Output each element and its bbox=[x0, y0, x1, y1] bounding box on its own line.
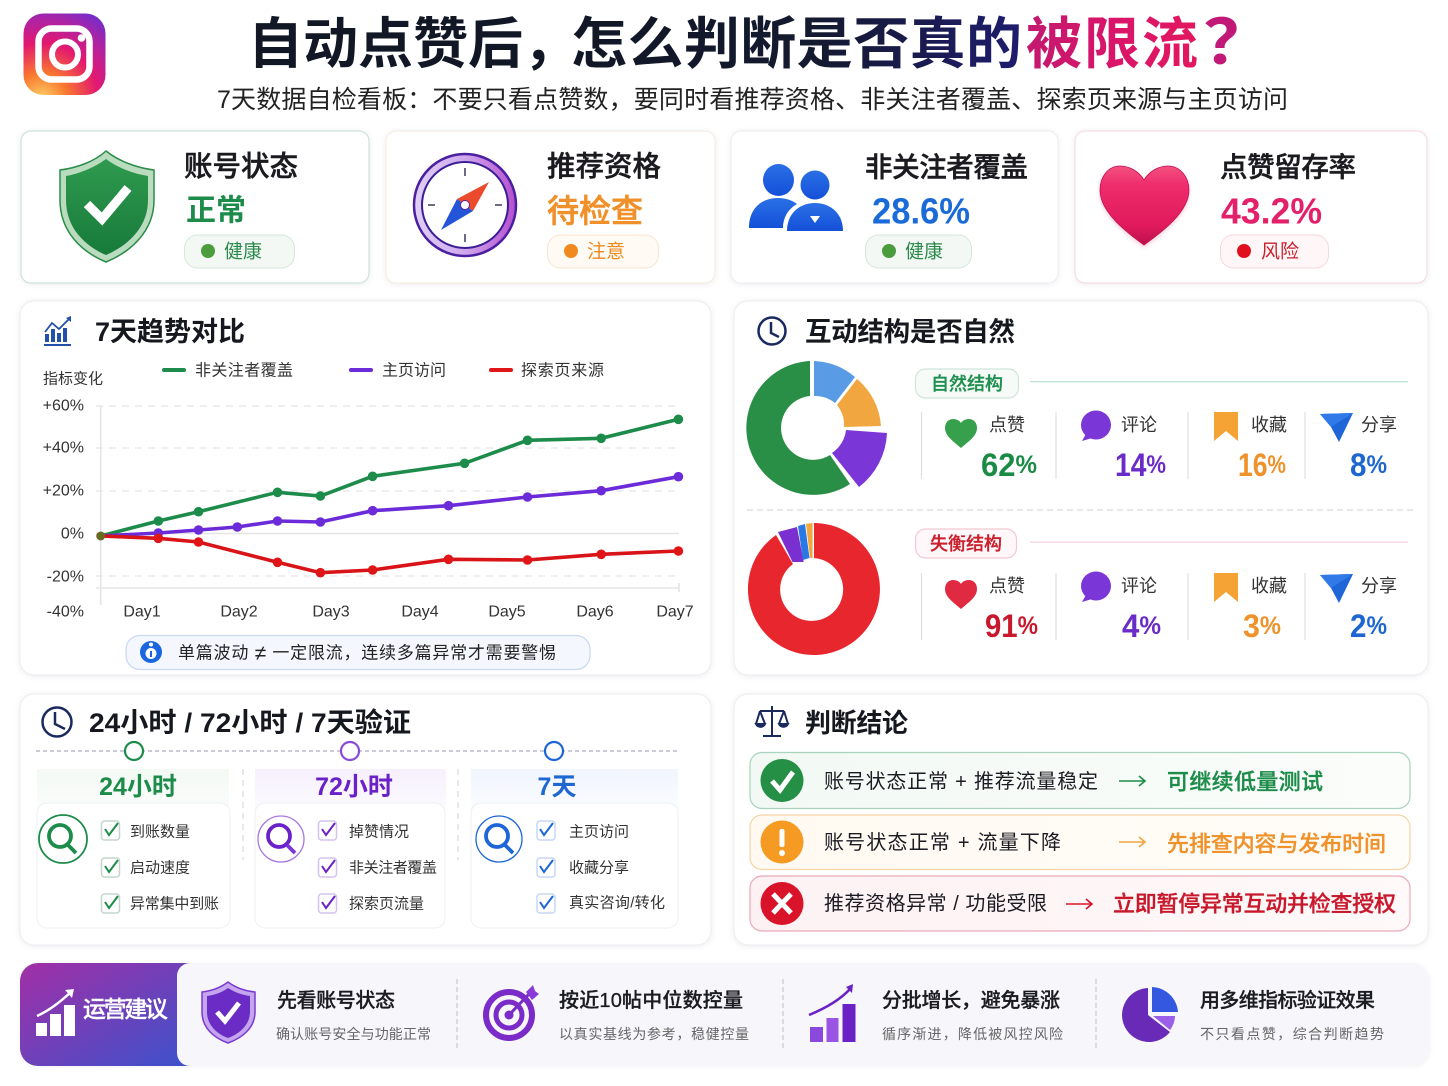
metric: comments 4%: 4% bbox=[1122, 608, 1161, 644]
status pill bbox=[866, 235, 972, 268]
checklist bbox=[318, 821, 437, 913]
metric: likes 91%: 点赞 bbox=[989, 576, 1025, 596]
panel: interaction structure bbox=[734, 301, 1428, 675]
line chart: -20% bbox=[47, 568, 84, 586]
metric: saves 3%: 收藏 bbox=[1251, 576, 1287, 596]
line chart: 0% bbox=[61, 526, 84, 542]
icon: growth bbox=[36, 989, 75, 1036]
line chart: Day4 bbox=[401, 604, 439, 620]
legend: 探索页来源 bbox=[521, 362, 604, 380]
column: 72 hours bbox=[255, 769, 446, 928]
metric: comments 14%: 评论 bbox=[1121, 415, 1157, 435]
metric: likes 91%: 91% bbox=[985, 608, 1038, 644]
line chart bbox=[43, 398, 694, 620]
panel: account status card bbox=[21, 131, 369, 283]
title bbox=[248, 9, 1275, 77]
icon: compass bbox=[414, 154, 516, 256]
icon: people bbox=[749, 164, 843, 231]
row: check content first: 账号状态正常 + 流量下降 bbox=[824, 831, 1061, 854]
advice: check account status: 先看账号状态 bbox=[277, 989, 395, 1012]
title: 怎么判断是否真的 bbox=[571, 12, 1022, 76]
tag: unbalanced structure bbox=[916, 529, 1408, 558]
status pill: 风险 bbox=[1261, 240, 1299, 262]
donut: unbalanced structure bbox=[748, 523, 880, 655]
metric: shares 8%: 8% bbox=[1350, 447, 1387, 483]
icon: scales bbox=[756, 706, 788, 736]
card label: 点赞留存率 bbox=[1220, 152, 1356, 182]
column: 24 hours: 24小时 bbox=[99, 773, 177, 801]
metric: likes 62%: 点赞 bbox=[989, 415, 1025, 435]
icon: clock bbox=[42, 708, 72, 736]
status pill bbox=[1220, 235, 1328, 268]
card label: 推荐资格 bbox=[547, 151, 661, 183]
status pill: 注意 bbox=[587, 240, 625, 262]
status value: 正常 bbox=[186, 194, 246, 228]
status pill bbox=[184, 235, 294, 268]
metric: comments 4%: 评论 bbox=[1121, 576, 1157, 596]
line chart: Day2 bbox=[220, 604, 258, 620]
row: continue testing bbox=[750, 752, 1410, 808]
checklist: 启动速度 bbox=[130, 860, 190, 876]
row: check content first bbox=[750, 815, 1410, 870]
advice: median control bbox=[486, 985, 749, 1042]
metric: shares 8% bbox=[1320, 413, 1397, 483]
label block: operating advice bbox=[20, 963, 210, 1066]
title: ？ bbox=[1203, 9, 1275, 77]
line chart: Day3 bbox=[312, 604, 350, 620]
series: non-follower coverage bbox=[101, 414, 683, 536]
callout: note: 单篇波动 ≠ 一定限流，连续多篇异常才需要警惕 bbox=[178, 642, 556, 664]
tag: unbalanced structure: 失衡结构 bbox=[930, 534, 1002, 554]
advice: multi-dimensional verification: 不只看点赞，综合判断趋势 bbox=[1200, 1026, 1384, 1042]
line chart: Day1 bbox=[123, 604, 161, 620]
advice: phased growth: 分批增长，避免暴涨 bbox=[882, 989, 1060, 1012]
icon: magnifier bbox=[258, 816, 304, 862]
legend bbox=[162, 362, 604, 380]
legend: 非关注者覆盖 bbox=[195, 362, 293, 380]
advice: check account status: 确认账号安全与功能正常 bbox=[276, 1026, 431, 1042]
metric: saves 16% bbox=[1214, 412, 1287, 483]
heading: 24小时 / 72小时 / 7天验证 bbox=[89, 708, 411, 738]
line chart: Day7 bbox=[656, 604, 694, 620]
timeline bbox=[36, 742, 678, 760]
advice: multi-dimensional verification bbox=[1122, 987, 1384, 1042]
metric: likes 62%: 62% bbox=[981, 447, 1037, 483]
status pill bbox=[548, 235, 658, 268]
icon: trend chart bbox=[44, 316, 71, 346]
panel: 7-day trend bbox=[20, 301, 711, 675]
row: continue testing: 账号状态正常 + 推荐流量稳定 bbox=[824, 770, 1098, 793]
metric: shares 2% bbox=[1320, 574, 1397, 644]
panel: like retention card bbox=[1075, 131, 1427, 283]
metric: saves 16%: 收藏 bbox=[1251, 415, 1287, 435]
panel: conclusion bbox=[734, 694, 1428, 945]
heading: 互动结构是否自然 bbox=[805, 317, 1015, 347]
checklist: 非关注者覆盖 bbox=[349, 860, 437, 876]
title: 自动点赞后， bbox=[248, 13, 578, 75]
metric: comments 14% bbox=[1081, 410, 1166, 483]
line chart: +20% bbox=[43, 482, 84, 500]
metric value: 28.6% bbox=[872, 190, 970, 232]
icon: magnifier bbox=[476, 816, 522, 862]
column: 7 days bbox=[471, 769, 678, 928]
row: pause immediately: 立即暂停异常互动并检查授权 bbox=[1113, 892, 1396, 916]
donut: natural structure bbox=[746, 361, 887, 495]
advice: median control: 按近10帖中位数控量 bbox=[559, 989, 743, 1012]
checklist: 真实咨询/转化 bbox=[569, 894, 665, 912]
row: pause immediately bbox=[750, 876, 1410, 931]
checklist: 掉赞情况 bbox=[349, 824, 409, 840]
metric: saves 3%: 3% bbox=[1243, 608, 1281, 644]
line chart: +40% bbox=[43, 440, 84, 456]
series: profile visits bbox=[101, 472, 683, 538]
status pill: 健康 bbox=[224, 240, 262, 262]
line chart: Day5 bbox=[488, 604, 526, 620]
metric: likes 62% bbox=[945, 415, 1037, 483]
checklist: 收藏分享 bbox=[569, 860, 629, 876]
panel: 24h / 72h / 7d verification bbox=[20, 694, 711, 945]
row: continue testing: 可继续低量测试 bbox=[1167, 770, 1323, 794]
series: explore page source bbox=[96, 532, 683, 578]
title: 被限流 bbox=[1026, 12, 1198, 76]
metric value: 43.2% bbox=[1221, 190, 1322, 232]
column: 72 hours: 72小时 bbox=[315, 773, 393, 801]
advice: check account status bbox=[202, 982, 431, 1043]
metric: saves 3% bbox=[1214, 573, 1287, 644]
axis title: 指标变化 bbox=[43, 370, 103, 388]
checklist bbox=[102, 821, 219, 913]
status pill: 健康 bbox=[905, 240, 943, 262]
callout: note bbox=[126, 636, 590, 670]
metric: shares 2%: 2% bbox=[1350, 608, 1387, 644]
advice: phased growth: 循序渐进，降低被风控风险 bbox=[882, 1026, 1063, 1042]
subtitle: 7天数据自检看板：不要只看点赞数，要同时看推荐资格、非关注者覆盖、探索页来源与主页访问 bbox=[217, 86, 1288, 114]
checklist: 主页访问 bbox=[569, 824, 629, 840]
card label: 账号状态 bbox=[184, 151, 298, 183]
line chart: Day6 bbox=[576, 604, 614, 620]
checklist: 异常集中到账 bbox=[130, 896, 219, 912]
advice: median control: 以真实基线为参考，稳健控量 bbox=[559, 1026, 749, 1042]
panel: non-follower coverage card bbox=[731, 131, 1058, 283]
panel: recommendation eligibility card bbox=[386, 131, 715, 283]
icon: magnifier bbox=[39, 815, 87, 863]
metric: saves 16%: 16% bbox=[1238, 447, 1286, 483]
row: pause immediately: 推荐资格异常 / 功能受限 bbox=[824, 892, 1047, 915]
metric: comments 14%: 14% bbox=[1115, 447, 1166, 483]
metric: shares 8%: 分享 bbox=[1361, 415, 1397, 435]
advice: phased growth bbox=[809, 984, 1063, 1042]
panel: operating advice bar bbox=[20, 963, 1430, 1066]
metric: likes 91% bbox=[945, 576, 1038, 644]
line chart: +60% bbox=[43, 398, 84, 414]
column: 7 days: 7天 bbox=[538, 773, 576, 801]
tag: natural structure: 自然结构 bbox=[931, 373, 1003, 394]
icon: green shield bbox=[60, 151, 154, 262]
column: 24 hours bbox=[37, 769, 230, 928]
metric: shares 2%: 分享 bbox=[1361, 576, 1397, 596]
legend: 主页访问 bbox=[382, 362, 446, 380]
label block: operating advice: 运营建议 bbox=[83, 996, 168, 1022]
icon: clock bbox=[758, 318, 786, 344]
checklist bbox=[537, 821, 665, 913]
row: check content first: 先排查内容与发布时间 bbox=[1167, 832, 1386, 856]
card label: 非关注者覆盖 bbox=[865, 152, 1028, 182]
heading: 7天趋势对比 bbox=[95, 317, 245, 347]
heading: 判断结论 bbox=[805, 708, 908, 738]
status value: 待检查 bbox=[547, 193, 643, 229]
checklist: 到账数量 bbox=[130, 824, 190, 840]
advice: multi-dimensional verification: 用多维指标验证效果 bbox=[1200, 989, 1375, 1012]
tag: natural structure bbox=[916, 369, 1408, 398]
line chart: -40% bbox=[47, 604, 84, 620]
metric: comments 4% bbox=[1081, 572, 1161, 644]
icon: big heart bbox=[1100, 166, 1189, 245]
checklist: 探索页流量 bbox=[349, 896, 424, 912]
icon: instagram logo bbox=[24, 14, 106, 95]
